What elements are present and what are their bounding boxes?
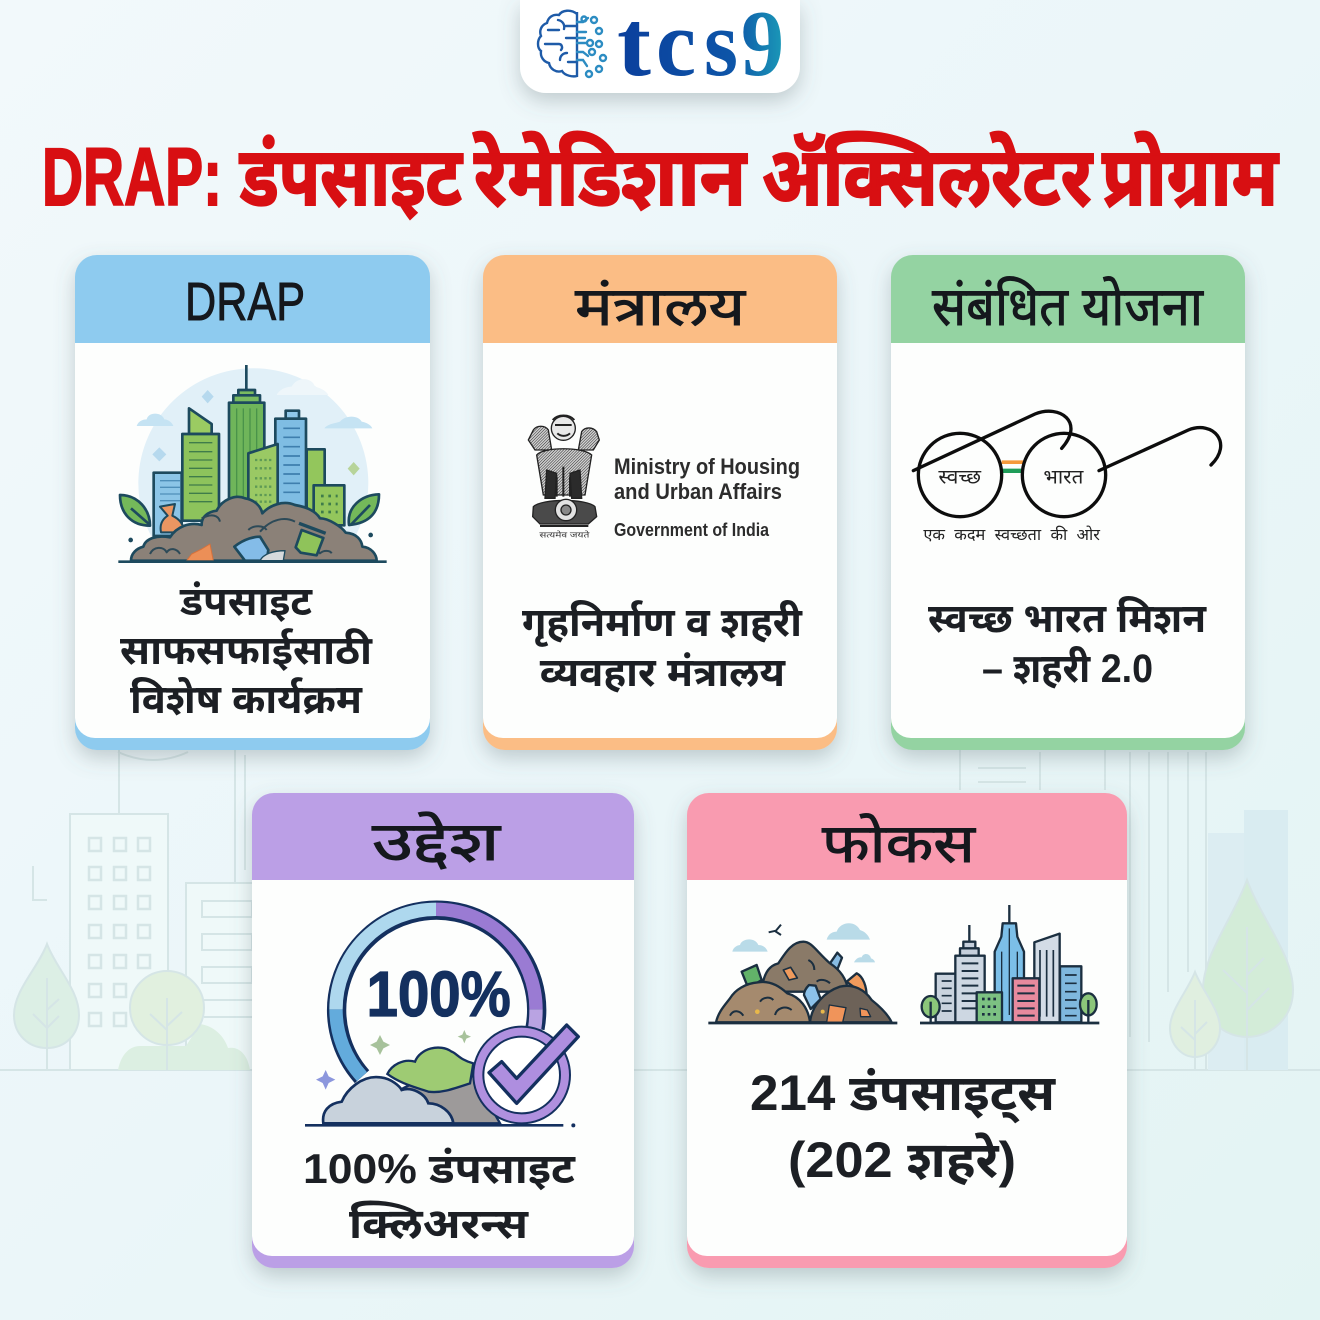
icon: national emblem: सत्यमेव जयते xyxy=(539,530,590,539)
text: ministry name xyxy=(614,454,800,540)
logo wordmark xyxy=(617,0,784,96)
icon: city rising behind waste mound xyxy=(118,365,387,562)
title: प्रोग्राम xyxy=(1102,132,1279,223)
text: description xyxy=(120,580,373,722)
text: description xyxy=(928,596,1207,691)
text: description xyxy=(303,1145,576,1247)
icon: Swachh Bharat glasses: एक कदम स्वच्छता की ओर xyxy=(923,525,1100,544)
title: रेमेडिशान xyxy=(473,131,747,223)
icon: city skyline xyxy=(920,905,1099,1023)
title: डंपसाइट xyxy=(239,132,464,223)
panel: DRAP xyxy=(75,255,430,750)
heading: related scheme: संबंधित योजना xyxy=(932,276,1204,337)
text: description xyxy=(750,1065,1056,1188)
panel: ministry xyxy=(483,255,837,750)
logo badge xyxy=(520,0,800,96)
text: description xyxy=(522,600,803,695)
text: description: गृहनिर्माण व शहरी xyxy=(522,600,803,647)
panel: related scheme xyxy=(891,255,1245,750)
icon: national emblem xyxy=(528,415,599,539)
title: DRAP: xyxy=(42,132,222,223)
panel: focus xyxy=(687,793,1127,1268)
text: description: व्यवहार मंत्रालय xyxy=(539,651,786,695)
heading: DRAP: DRAP xyxy=(185,272,305,332)
heading: focus: फोकस xyxy=(822,813,977,874)
text: 100%: 100% xyxy=(367,958,511,1030)
text: description: विशेष कार्यक्रम xyxy=(130,677,363,722)
title: ॲक्सिलरेटर xyxy=(762,131,1094,223)
text: description: साफसफाईसाठी xyxy=(120,628,373,673)
icon: Swachh Bharat glasses xyxy=(913,411,1221,544)
text: ministry name: Government of India xyxy=(614,520,770,540)
text: description: – शहरी 2.0 xyxy=(982,646,1153,691)
heading: ministry: मंत्रालय xyxy=(575,277,747,337)
text: description: स्वच्छ भारत मिशन xyxy=(928,596,1207,641)
text: ministry name: and Urban Affairs xyxy=(614,479,782,504)
icon: Swachh Bharat glasses: स्वच्छ xyxy=(938,466,982,488)
faint city backdrop xyxy=(0,750,1320,1070)
text: description: 100% डंपसाइट xyxy=(303,1145,576,1192)
icon: Swachh Bharat glasses: भारत xyxy=(1043,466,1084,488)
panel: objective xyxy=(252,793,634,1268)
text: ministry name: Ministry of Housing xyxy=(614,454,800,479)
text: description: 214 डंपसाइट्स xyxy=(750,1065,1056,1124)
icon: 100% progress ring with check xyxy=(305,909,578,1127)
heading: objective: उद्देश xyxy=(372,811,502,872)
icon: circuit brain xyxy=(538,11,606,77)
text: description: क्लिअरन्स xyxy=(349,1200,529,1247)
text: description: डंपसाइट xyxy=(179,580,313,624)
title xyxy=(42,131,1279,223)
text: description: (202 शहरे) xyxy=(788,1132,1016,1188)
icon: waste mound xyxy=(708,923,897,1023)
